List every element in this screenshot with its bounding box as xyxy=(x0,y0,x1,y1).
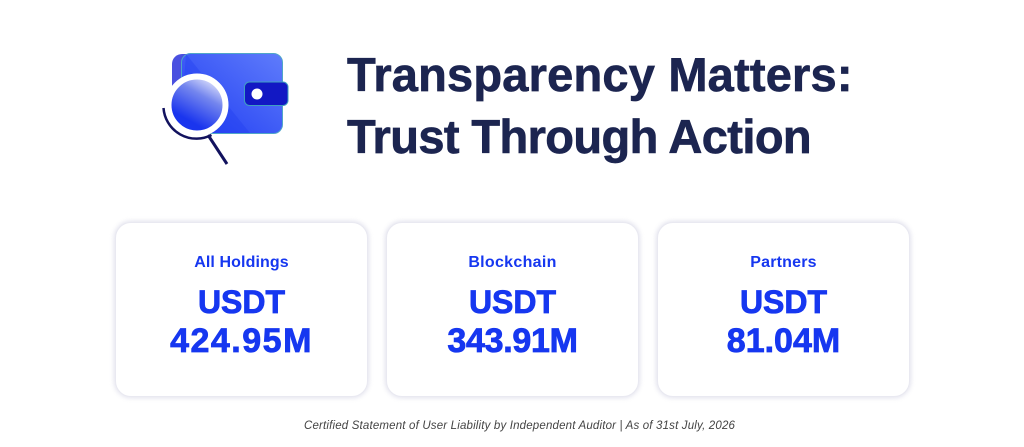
panel: all holdings: All Holdings xyxy=(194,254,289,271)
panel: partners xyxy=(657,222,910,397)
panel: partners: 81.04M xyxy=(727,322,840,360)
footnote: Certified Statement of User Liability by Independent Auditor | As of 31st July, 2026 xyxy=(304,420,735,432)
panel: blockchain: Blockchain xyxy=(468,254,557,271)
panel: partners: USDT xyxy=(740,284,827,320)
icon: wallet with magnifying glass xyxy=(162,53,288,165)
panel: all holdings: USDT xyxy=(198,284,285,320)
panel: partners: Partners xyxy=(750,254,817,271)
panel: blockchain: 343.91M xyxy=(447,322,578,360)
panel: all holdings xyxy=(115,222,368,397)
panel: blockchain: USDT xyxy=(469,284,556,320)
panel: blockchain xyxy=(386,222,639,397)
panel: all holdings: 424.95M xyxy=(170,322,313,360)
title: Transparency Matters: xyxy=(347,48,853,101)
subtitle: Trust Through Action xyxy=(347,110,811,163)
